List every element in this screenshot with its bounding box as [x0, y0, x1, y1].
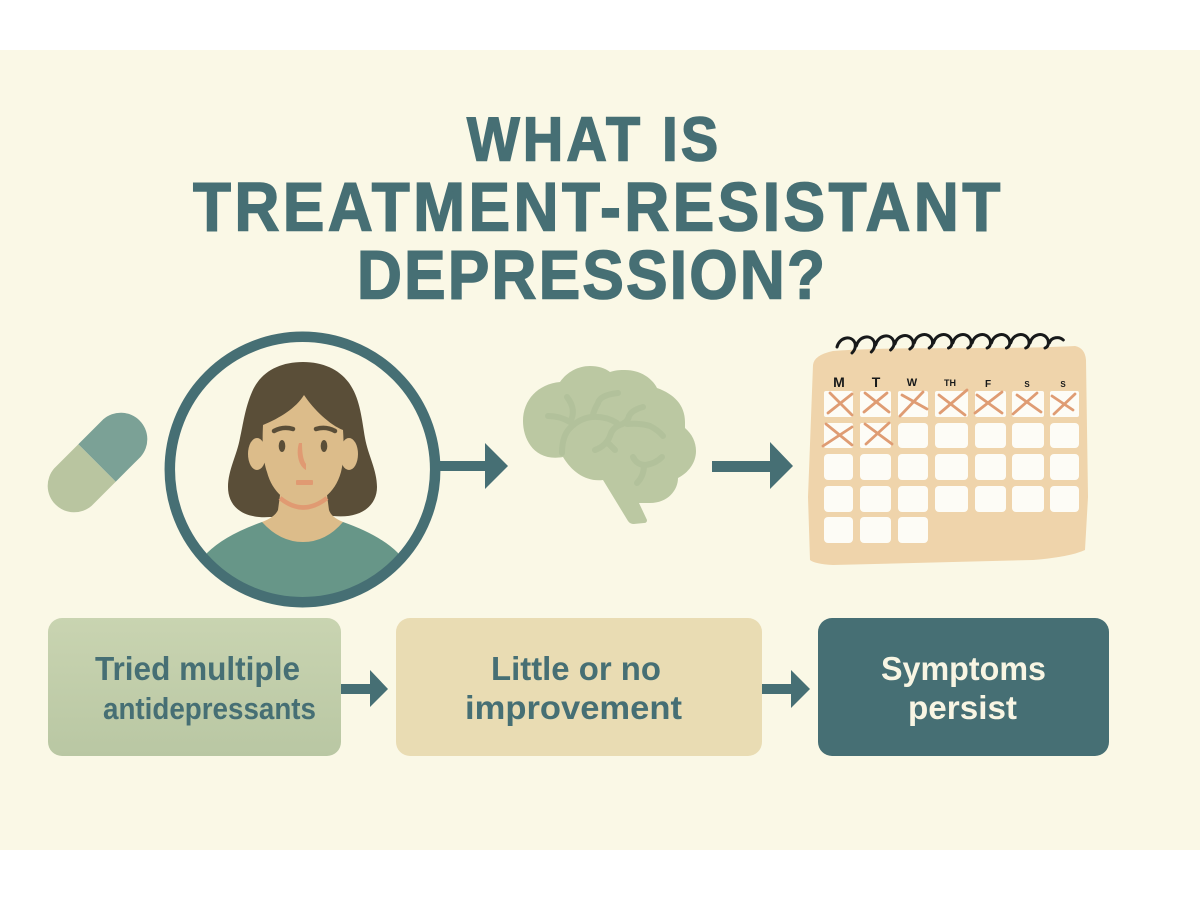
arrow: person to brain	[440, 443, 508, 489]
arrow: brain to calendar	[712, 442, 793, 489]
step 1 box: tried multiple antidepressants: antidepressants	[103, 691, 316, 726]
step 2 box: little or no improvement: improvement	[465, 689, 682, 726]
step 3 box: symptoms persist	[818, 618, 1109, 756]
icon: person in circle	[170, 337, 435, 620]
title: WHAT IS	[467, 106, 718, 174]
calendar weekday labels	[833, 374, 1066, 390]
title: TREATMENT-RESISTANT	[193, 168, 1000, 245]
step 2 box: little or no improvement: Little or no	[491, 650, 661, 687]
calendar day cells	[824, 391, 1079, 543]
title	[193, 106, 1000, 313]
calendar spiral binding	[837, 335, 1063, 353]
calendar weekday labels: S	[1060, 380, 1066, 389]
calendar weekday labels: F	[985, 379, 991, 390]
calendar crossed-off days	[823, 390, 1075, 446]
icon: calendar	[808, 335, 1088, 565]
calendar weekday labels: T	[872, 374, 881, 390]
title: DEPRESSION?	[357, 236, 825, 313]
calendar weekday labels: W	[907, 377, 918, 389]
step 1 box: tried multiple antidepressants	[48, 618, 341, 756]
step 3 box: symptoms persist: persist	[908, 689, 1017, 726]
icon: brain	[523, 366, 696, 524]
step 2 box: little or no improvement	[396, 618, 762, 756]
arrow: step 2 to step 3	[762, 670, 810, 708]
calendar weekday labels: M	[833, 374, 845, 390]
step 1 box: tried multiple antidepressants: Tried multiple	[95, 650, 300, 687]
icon: pill capsule	[48, 413, 147, 512]
step 3 box: symptoms persist: Symptoms	[881, 650, 1046, 687]
calendar weekday labels: TH	[944, 378, 956, 388]
arrow: step 1 to step 2	[341, 670, 388, 707]
calendar weekday labels: S	[1024, 380, 1030, 389]
